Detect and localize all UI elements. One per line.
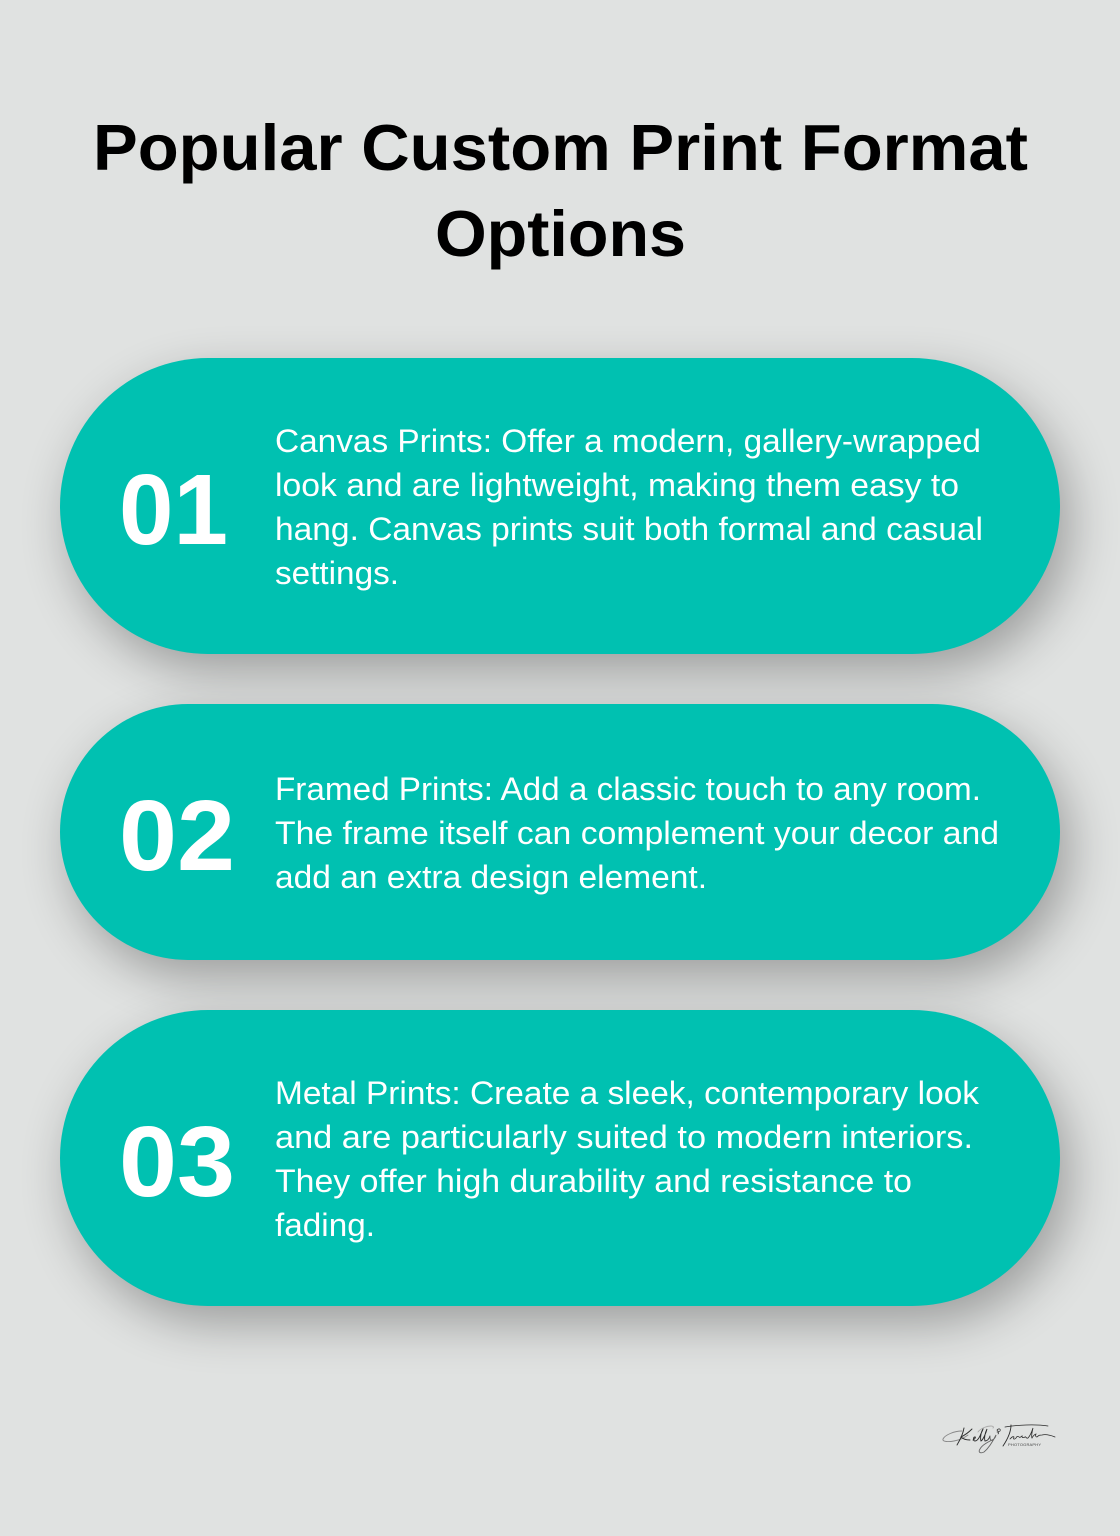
panel: canvas prints background [60, 358, 1060, 654]
text block: canvas prints: hang. Canvas prints suit both formal and casual [275, 511, 983, 547]
title [93, 112, 1028, 270]
text block: metal prints: and are particularly suited to modern interiors. [275, 1119, 973, 1155]
title: Popular Custom Print Format [93, 112, 1028, 184]
panel: metal prints background [60, 1010, 1060, 1306]
text block: metal prints: Metal Prints: Create a sleek, contemporary look [275, 1075, 980, 1111]
text block: framed prints: add an extra design element. [275, 859, 707, 895]
logo: photography wordmark: PHOTOGRAPHY [1008, 1442, 1041, 1447]
text block: metal prints: They offer high durability and resistance to [275, 1163, 912, 1199]
text block: canvas prints: settings. [275, 555, 399, 591]
text block: metal prints: fading. [275, 1207, 375, 1243]
text block: framed prints [275, 771, 999, 895]
number 02: 02 [119, 780, 235, 892]
title: Options [435, 198, 686, 270]
panel: framed prints background [60, 704, 1060, 960]
text block: canvas prints [275, 423, 983, 591]
text block: framed prints: The frame itself can complement your decor and [275, 815, 999, 851]
text block: framed prints: Framed Prints: Add a classic touch to any room. [275, 771, 981, 807]
number 03: 03 [119, 1106, 235, 1218]
text block: canvas prints: look and are lightweight, making them easy to [275, 467, 959, 503]
number 01: 01 [119, 454, 228, 566]
text block: metal prints [275, 1075, 980, 1243]
logo: signature [943, 1425, 1055, 1453]
text block: canvas prints: Canvas Prints: Offer a modern, gallery-wrapped [275, 423, 981, 459]
